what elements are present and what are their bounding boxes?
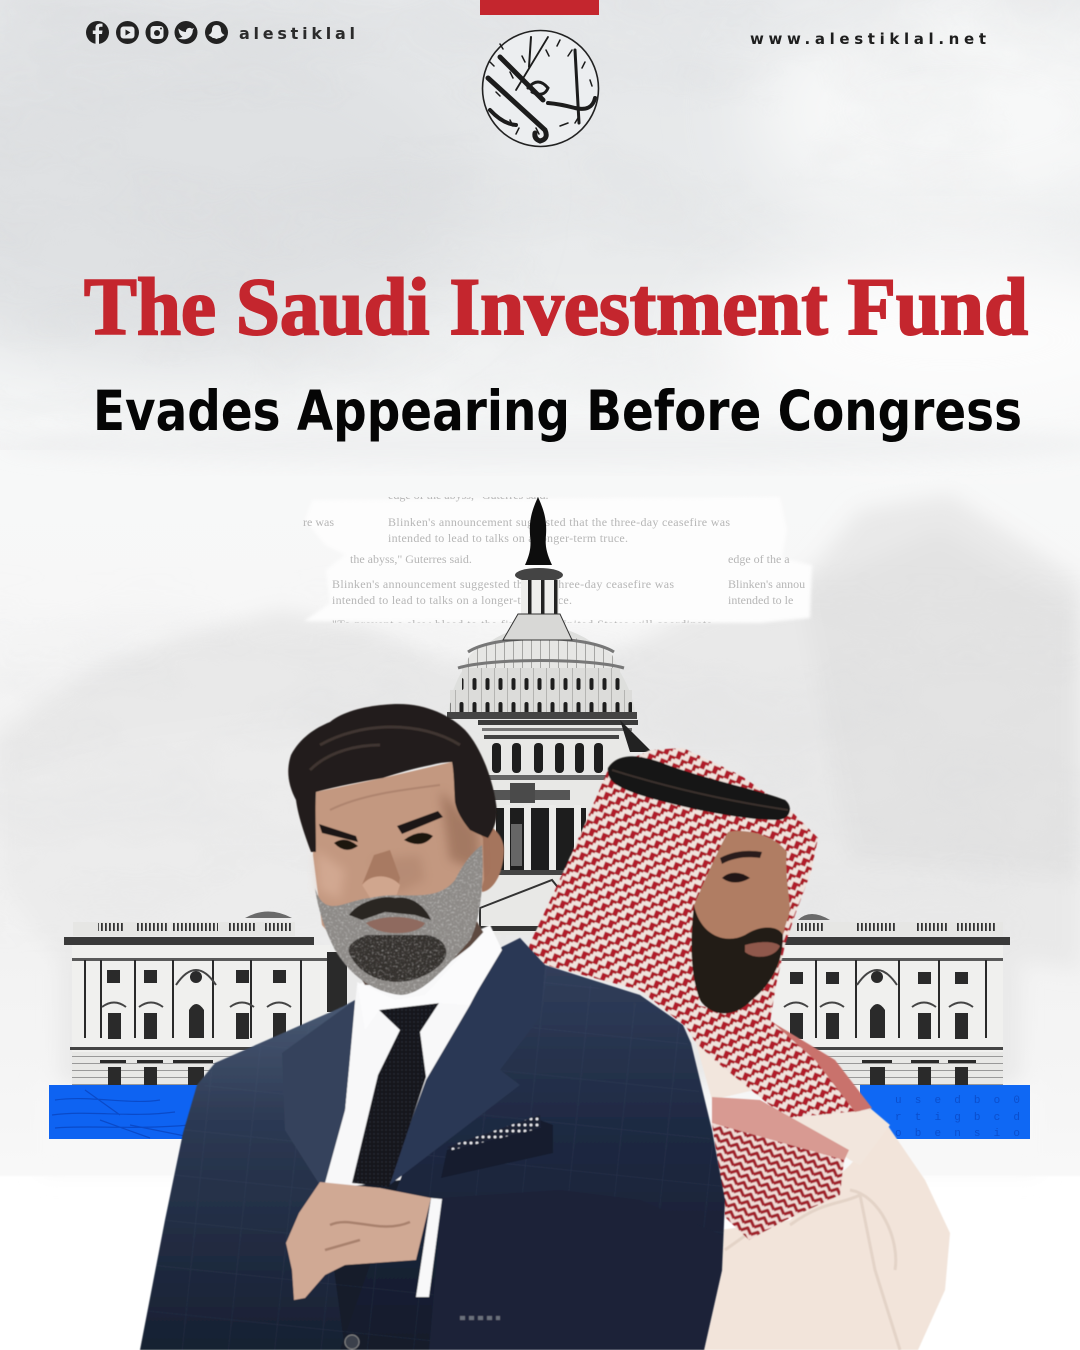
newspaper clipping: Blinken's announcement suggested that the three-day ceasefire was [388,515,730,529]
newspaper clipping: Blinken's annou [728,577,805,591]
tie [352,1003,439,1187]
beard [692,905,783,1014]
blue band [49,1085,1030,1140]
hand [286,1182,431,1300]
capitol building [64,497,1010,1085]
jacket right [340,938,725,1350]
brows and eyes [319,811,443,842]
newspaper clipping: intended to le [728,593,793,607]
website address: www.alestiklal.net [750,30,986,48]
neck shadow [350,910,485,985]
jacket base [300,1180,440,1350]
blue band: o b e n s i o [895,1128,1020,1140]
face shading [440,790,480,870]
newspaper clipping: edge of the abyss," Guterres said. [388,488,549,502]
nose [362,850,400,898]
plaid overlay [140,948,725,1350]
icon: snapchat [205,21,228,44]
top red tab [480,0,599,15]
neck scarf: chevrons [712,1123,844,1240]
jacket left [140,1000,355,1350]
breast pocket [441,1120,553,1178]
face [313,762,484,985]
headscarf [526,748,818,1030]
left figure: man in navy suit [140,704,725,1350]
newspaper clipping [303,497,812,624]
dome [447,625,652,752]
agal [608,756,790,820]
collar [357,925,502,1030]
newspaper clipping: re was [303,515,334,529]
neck scarf: red checks [670,1000,870,1118]
newspaper clipping: "To prevent a slow bleed to the finish, the United States will coordinate [332,617,712,631]
lapel right [387,938,545,1187]
shirt [323,925,502,1190]
social icons [86,21,228,44]
blue band: u s e d b o 0 [895,1095,1020,1107]
lantern and statue [503,497,572,640]
ear [478,826,504,892]
moustache and lip [349,897,431,920]
newspaper clipping: intended to lead to talks on a longer-term truce. [332,593,572,607]
title line 1: The Saudi Investment Fund [84,261,1028,352]
beard [315,845,483,995]
neck scarf: pink stripes [712,1097,849,1165]
icon: instagram [146,21,168,44]
icon: facebook [86,21,109,44]
brand name: alestiklal [239,24,355,43]
pocket square [447,1115,541,1150]
blue band: r t i g b c d [895,1112,1020,1124]
lapel left [282,1000,355,1190]
icon: youtube [116,21,139,44]
newspaper clipping: edge of the a [728,552,790,566]
left wing [64,912,347,1085]
sleeve [429,1190,722,1350]
newspaper clipping: intended to lead to talks on a longer-term truce. [388,531,628,545]
hair [288,704,497,852]
logo: calligraphy roundel [482,30,598,146]
lower drum [478,720,638,935]
robe [701,1123,950,1350]
buttons [345,1335,359,1349]
right figure: man in keffiyeh [526,748,950,1350]
mountains backdrop [6,498,1080,1077]
right wing [770,914,1010,1085]
newspaper clipping: the abyss," Guterres said. [350,552,472,566]
face [692,831,790,1012]
icon: twitter [174,21,198,44]
cuff [416,1198,442,1297]
newspaper clipping: Blinken's announcement suggested that the three-day ceasefire was [332,577,674,591]
neck scarf: white folds [696,1043,890,1165]
